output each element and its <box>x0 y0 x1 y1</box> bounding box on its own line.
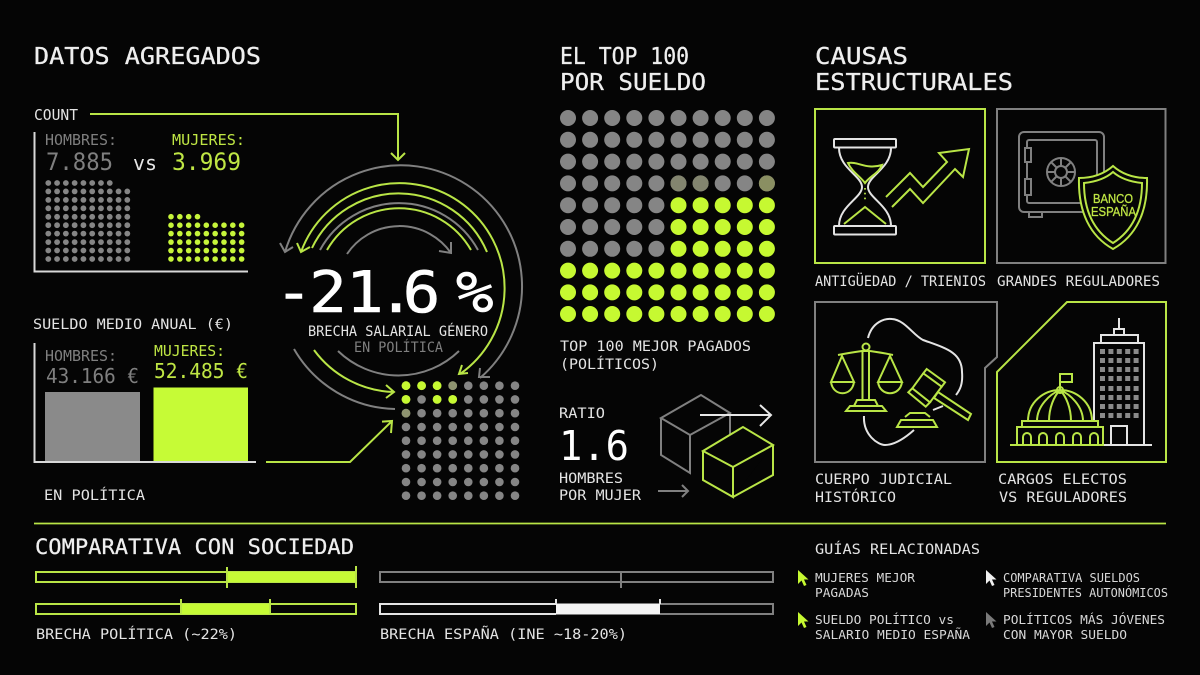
icon: capitol <box>1010 374 1103 445</box>
panel: guías relacionadas <box>798 541 1168 642</box>
caption: en política: EN POLÍTICA <box>354 339 444 356</box>
chart: circular arrows <box>280 165 522 409</box>
icon: cursor white <box>986 570 996 586</box>
sueldo heading: SUELDO MEDIO ANUAL (€) <box>33 317 233 333</box>
icon: cursor lime <box>798 612 808 628</box>
ratio <box>559 406 642 504</box>
hombres count: HOMBRES: <box>45 131 117 149</box>
icon: tower <box>1094 318 1152 445</box>
chart: brecha política <box>36 566 356 614</box>
ratio: HOMBRES <box>559 471 623 487</box>
dot grid: brecha <box>402 381 519 500</box>
headline figure: -21.6 % <box>275 260 494 326</box>
icon: shield: BANCO <box>1093 191 1133 206</box>
dot chart: hombres <box>45 180 130 262</box>
link: comparativa sueldos <box>1003 571 1168 600</box>
label: cuerpo judicial: HISTÓRICO <box>815 488 896 506</box>
ratio: RATIO <box>559 406 605 422</box>
icon: cursor lime <box>798 570 808 586</box>
heading: causas <box>815 42 1013 96</box>
caption: top 100 <box>560 339 751 373</box>
dot chart: mujeres <box>168 214 244 262</box>
panel: grandes reguladores <box>997 109 1166 263</box>
label: cargos electos <box>998 472 1127 506</box>
mujeres salary: 52.485 € <box>154 359 248 383</box>
icon: shield: ESPAÑA <box>1091 204 1136 219</box>
hombres count <box>45 131 117 176</box>
mujeres salary: MUJERES: <box>154 342 225 360</box>
label: cuerpo judicial <box>815 472 952 506</box>
panel: cargos electos <box>997 302 1166 462</box>
heading: top 100: POR SUELDO <box>560 68 706 96</box>
icon: gavel <box>897 369 971 427</box>
arrow: salary to centre <box>266 421 392 462</box>
mujeres salary <box>154 342 248 383</box>
dot grid: top 100 <box>560 110 775 322</box>
axes <box>34 343 256 462</box>
caption: top 100: (POLÍTICOS) <box>560 356 659 373</box>
panel: cuerpo judicial <box>815 302 997 462</box>
en política label: EN POLÍTICA <box>44 487 146 504</box>
icon: cubes <box>661 395 773 497</box>
label: antigüedad: ANTIGÜEDAD / TRIENIOS <box>815 272 986 290</box>
link: políticos jóvenes: CON MAYOR SUELDO <box>1003 628 1127 642</box>
label: grandes reguladores: GRANDES REGULADORES <box>997 274 1160 290</box>
link: sueldo político: SALARIO MEDIO ESPAÑA <box>815 627 971 642</box>
panel: antigüedad <box>815 109 985 263</box>
label: cargos electos: CARGOS ELECTOS <box>998 472 1127 488</box>
link: comparativa sueldos: PRESIDENTES AUTONÓMICOS <box>1003 585 1168 600</box>
mujeres count <box>172 131 245 176</box>
panel: count <box>34 106 405 272</box>
icon: shield <box>1079 166 1147 249</box>
caption: top 100: TOP 100 MEJOR PAGADOS <box>560 339 751 355</box>
heading: causas: CAUSAS <box>815 42 908 70</box>
hombres salary <box>45 347 139 388</box>
label: cuerpo judicial: CUERPO JUDICIAL <box>815 472 952 488</box>
vs: vs <box>133 151 157 175</box>
link: comparativa sueldos: COMPARATIVA SUELDOS <box>1003 571 1140 585</box>
bar: hombres <box>45 392 140 462</box>
caption: brecha salarial: BRECHA SALARIAL GÉNERO <box>308 323 488 340</box>
arrow: count to centre <box>90 114 405 160</box>
panel: sueldo medio <box>33 317 392 504</box>
link: mujeres mejor pagadas: PAGADAS <box>815 586 869 600</box>
ratio: 1.6 <box>559 422 629 470</box>
hombres count: 7.885 <box>46 148 113 176</box>
ratio: POR MUJER <box>559 488 642 504</box>
chart: brecha españa <box>380 572 773 614</box>
link: mujeres mejor pagadas: MUJERES MEJOR <box>815 571 916 585</box>
label: brecha españa: BRECHA ESPAÑA (INE ~18-20%) <box>380 626 627 643</box>
decorative cloud outline <box>864 319 962 445</box>
label: brecha política: BRECHA POLÍTICA (~22%) <box>36 626 237 643</box>
icon: rising arrow <box>886 149 969 207</box>
icon: cursor gray <box>986 612 996 628</box>
arrow: ratio small <box>658 485 688 497</box>
heading: top 100 <box>560 42 706 96</box>
mujeres count: MUJERES: <box>172 131 245 149</box>
link: sueldo político <box>815 612 971 642</box>
guías heading: GUÍAS RELACIONADAS <box>815 541 980 558</box>
heading: comparativa: COMPARATIVA CON SOCIEDAD <box>35 535 354 560</box>
link: sueldo político: SUELDO POLÍTICO vs <box>815 612 954 627</box>
count label: COUNT <box>34 106 78 124</box>
icon: safe <box>1019 132 1104 217</box>
panel: datos agregados heading: DATOS AGREGADOS <box>34 42 261 70</box>
link: políticos jóvenes: POLÍTICOS MÁS JÓVENES <box>1003 612 1165 627</box>
hombres salary: HOMBRES: <box>45 347 117 365</box>
bar: mujeres <box>154 388 248 462</box>
heading: causas: ESTRUCTURALES <box>815 68 1013 96</box>
icon: scales <box>831 344 902 411</box>
link: mujeres mejor pagadas <box>815 571 916 600</box>
mujeres count: 3.969 <box>172 148 241 176</box>
hombres salary: 43.166 € <box>46 364 139 388</box>
heading: top 100: EL TOP 100 <box>560 42 689 70</box>
icon: hourglass <box>834 139 896 234</box>
label: cargos electos: VS REGULADORES <box>999 490 1127 506</box>
link: políticos jóvenes <box>1003 612 1165 642</box>
axes <box>34 132 248 272</box>
